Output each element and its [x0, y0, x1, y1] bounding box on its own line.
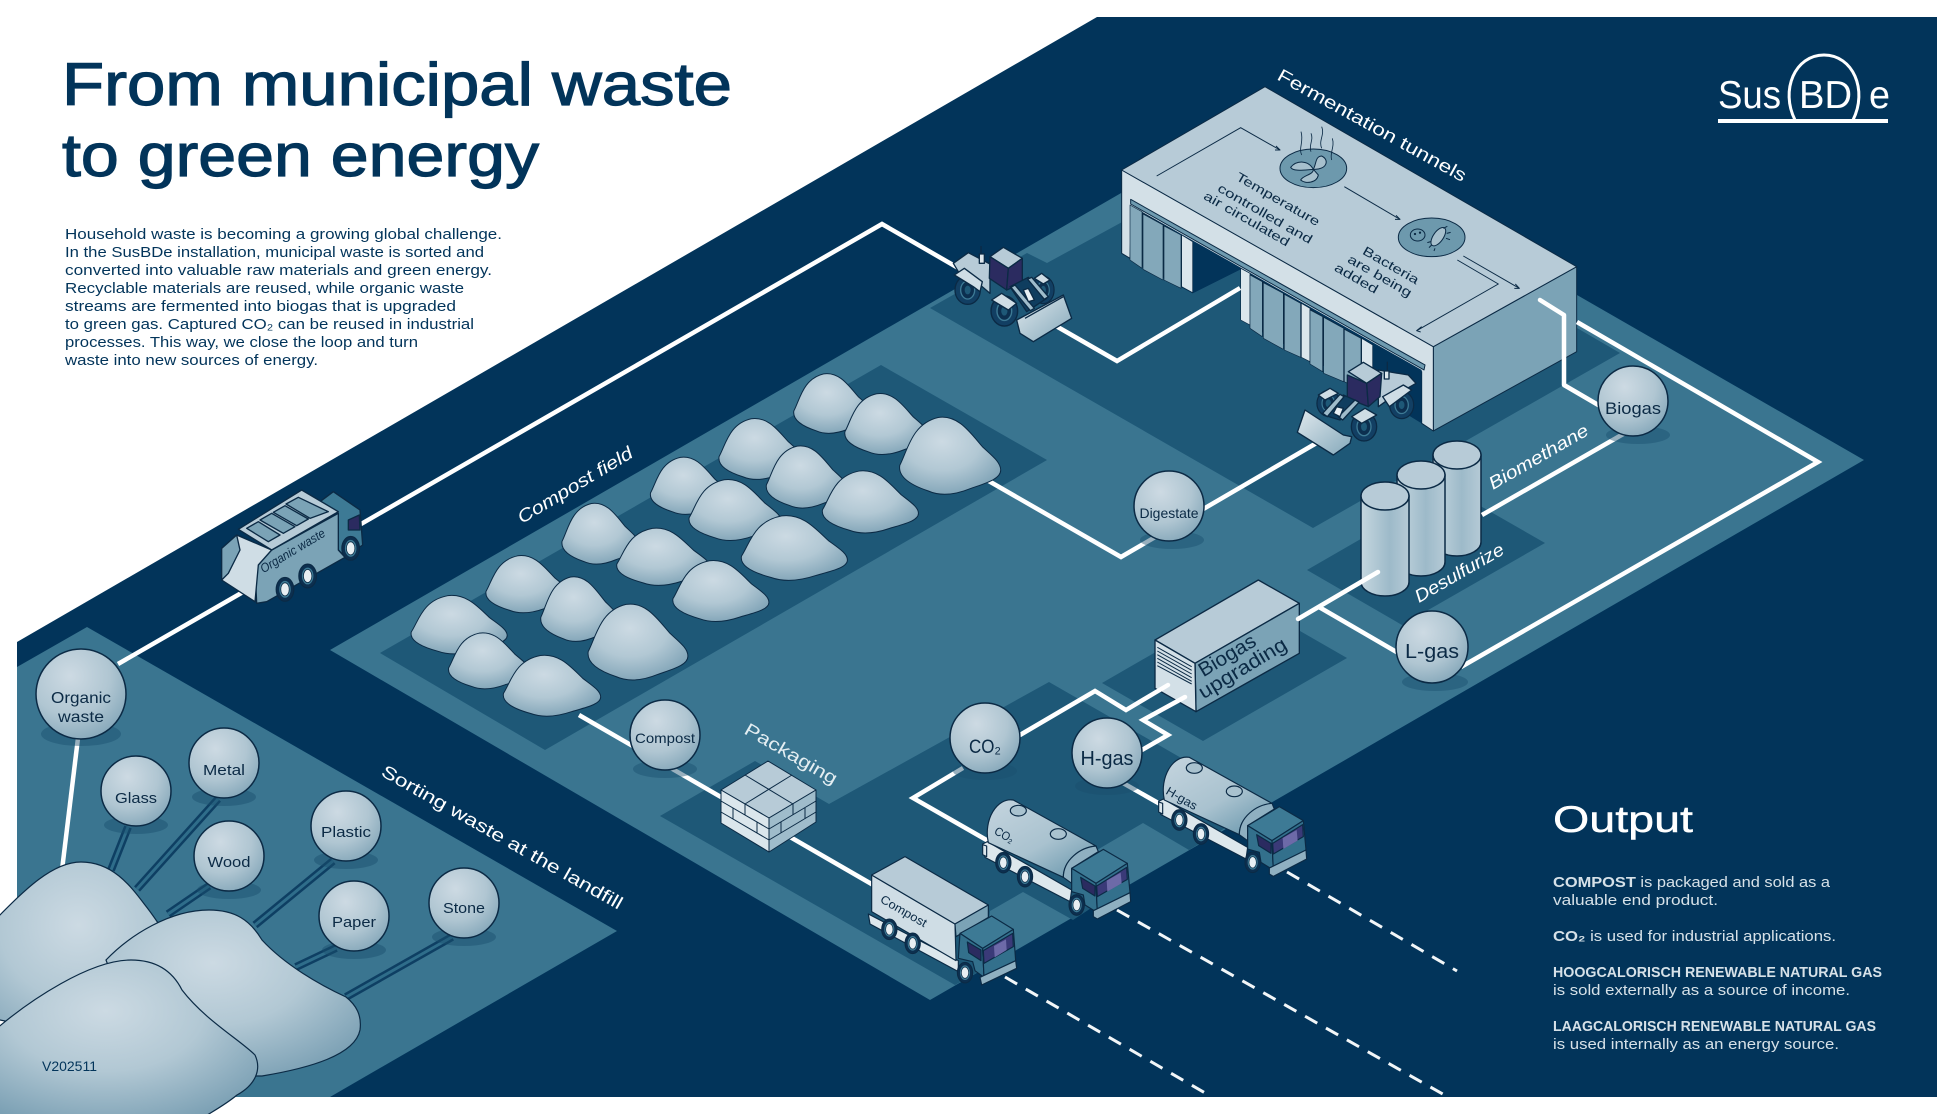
node: stone: Stone	[443, 900, 485, 917]
panel: biogas upgrading pad	[1102, 600, 1347, 741]
icon: fan with heat	[1280, 127, 1347, 188]
node: wood	[194, 821, 264, 891]
title: From municipal waste	[62, 51, 732, 118]
sorting conveyor lines	[62, 738, 452, 997]
node: compost	[630, 700, 700, 770]
roof text: bacteria: Bacteria	[1360, 244, 1423, 288]
node: plastic: Plastic	[321, 824, 372, 841]
node: compost: Compost	[635, 730, 695, 746]
logo: SusBDe	[1718, 55, 1890, 123]
roof text: bacteria	[1332, 244, 1423, 300]
roof text: temperature: Temperature	[1233, 170, 1322, 229]
roof flow arrows	[1157, 128, 1519, 332]
tanker label: CO₂	[992, 824, 1017, 846]
logo: SusBDe: e	[1869, 74, 1890, 117]
node: glass: Glass	[115, 790, 157, 807]
compost pallet cube	[721, 761, 816, 852]
door backing	[1130, 205, 1193, 293]
node: digestate	[1134, 471, 1204, 541]
node: organic waste: waste	[57, 709, 104, 726]
compost piles	[411, 374, 1001, 716]
node: H-gas: H-gas	[1080, 748, 1134, 770]
node: paper: Paper	[332, 914, 376, 931]
panel: sorting area	[17, 627, 617, 1097]
intro text: converted into valuable raw materials and green energy.	[65, 262, 492, 279]
node: organic waste: Organic	[51, 690, 111, 707]
node: paper	[319, 881, 389, 951]
node: CO2: CO₂	[969, 737, 1001, 758]
door rail	[1131, 199, 1425, 370]
node: metal: Metal	[203, 762, 245, 779]
circle shadows	[41, 426, 1670, 959]
output text: is used internally as an energy source.	[1553, 1036, 1839, 1053]
intro text: waste into new sources of energy.	[64, 352, 318, 369]
icon: bacteria	[1398, 218, 1465, 257]
output text: is sold externally as a source of income.	[1553, 982, 1850, 999]
node: CO2	[950, 703, 1020, 773]
process pipes	[118, 224, 1818, 886]
intro text: Recyclable materials are reused, while organic waste	[65, 280, 464, 297]
version label: V202511	[42, 1058, 97, 1074]
logo: SusBDe: Sus	[1718, 74, 1781, 117]
output text: LAAGCALORISCH RENEWABLE NATURAL GAS	[1553, 1018, 1876, 1035]
roof text: temperature: air circulated	[1201, 189, 1292, 249]
logo: SusBDe: BD	[1799, 74, 1852, 117]
node circles	[36, 366, 1670, 959]
roof text: temperature	[1201, 170, 1322, 249]
label: desulfurize: Desulfurize	[1411, 539, 1508, 606]
node: wood: Wood	[208, 854, 250, 871]
intro text: In the SusBDe installation, municipal waste is sorted and	[65, 244, 484, 261]
output text: COMPOST is packaged and sold as a	[1553, 874, 1831, 891]
wheel loader at tunnel entrance	[953, 246, 1072, 342]
panel: dark pad around fermentation tunnels	[930, 215, 1620, 528]
node: L-gas: L-gas	[1405, 641, 1459, 663]
intro text: Household waste is becoming a growing global challenge.	[65, 226, 502, 243]
door panels	[1130, 205, 1373, 393]
output text: valuable end product.	[1553, 892, 1718, 909]
truck label: Organic waste	[258, 526, 328, 576]
door backing right	[1241, 268, 1373, 393]
panel: compost field pad	[380, 365, 1047, 750]
output text: CO₂ is used for industrial applications.	[1553, 928, 1836, 945]
H-gas tanker truck	[1159, 757, 1307, 876]
roof text: bacteria: are being	[1345, 252, 1414, 300]
fermentation tunnels building	[1122, 87, 1577, 431]
intro text: processes. This way, we close the loop and turn	[65, 334, 418, 351]
panel: desulfurize pad	[1307, 488, 1545, 625]
panel: main processing site	[330, 185, 1864, 1000]
organic waste truck	[222, 490, 363, 603]
output text: HOOGCALORISCH RENEWABLE NATURAL GAS	[1553, 964, 1882, 981]
truck label: Compost	[878, 892, 930, 930]
panel: packaging and truck pad	[660, 682, 1263, 985]
label: sorting waste: Sorting waste at the landfill	[378, 761, 626, 913]
node: digestate: Digestate	[1140, 505, 1199, 521]
label: compost field: Compost field	[514, 442, 637, 527]
roof text: temperature: controlled and	[1215, 181, 1315, 247]
building roof	[1122, 87, 1577, 347]
label: packaging: Packaging	[741, 719, 841, 788]
unit label: upgrading	[1195, 634, 1291, 704]
roof text: bacteria: added	[1332, 260, 1381, 297]
desulfurization tanks	[1361, 441, 1481, 596]
CO2 tanker truck	[983, 800, 1131, 919]
building side wall	[1433, 267, 1577, 431]
node: stone	[429, 868, 499, 938]
tanker label: H-gas	[1163, 784, 1200, 813]
label: biomethane: Biomethane	[1485, 420, 1592, 493]
node: metal	[189, 728, 259, 798]
biogas upgrading unit	[1155, 580, 1299, 712]
label: fermentation tunnels: Fermentation tunnels	[1274, 65, 1470, 186]
building front wall	[1122, 170, 1433, 431]
node: biogas	[1598, 366, 1668, 436]
title: to green energy	[62, 122, 539, 189]
intro text: to green gas. Captured CO₂ can be reused in industrial	[65, 316, 474, 333]
wheel loader leaving tunnel	[1297, 362, 1416, 455]
node: organic waste	[36, 649, 126, 739]
title	[62, 51, 732, 189]
node: plastic	[311, 791, 381, 861]
node: glass	[101, 756, 171, 826]
node: L-gas	[1396, 611, 1468, 683]
output heading: Output	[1553, 799, 1694, 840]
compost truck	[868, 857, 1017, 985]
road dashes	[1005, 872, 1457, 1097]
node: biogas: Biogas	[1605, 399, 1661, 418]
node: H-gas	[1072, 718, 1142, 788]
intro text: streams are fermented into biogas that is upgraded	[65, 298, 456, 315]
output text	[1553, 874, 1882, 1053]
door bay interior	[1130, 205, 1422, 423]
unit label: Biogas	[1195, 630, 1260, 682]
landfill waste hills	[0, 862, 360, 1114]
intro text	[64, 226, 502, 369]
